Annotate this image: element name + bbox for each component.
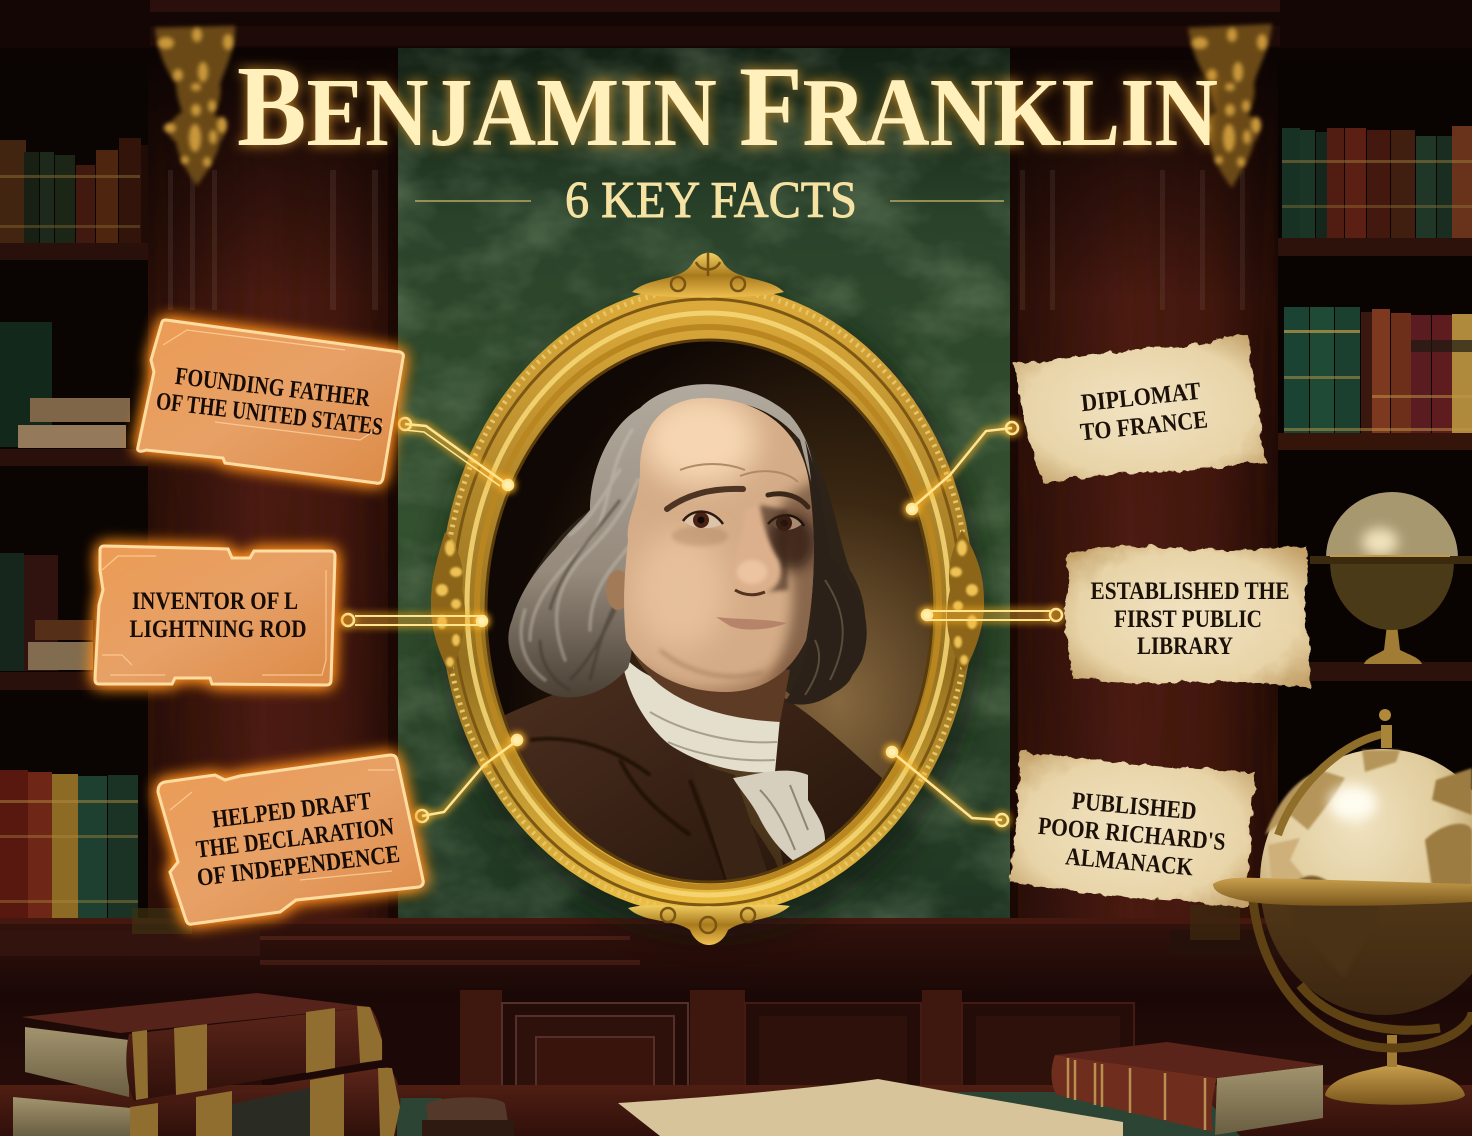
- frame right scroll: [947, 530, 984, 672]
- card: inventor: [95, 546, 335, 685]
- card: inventor: INVENTOR OF L: [132, 588, 298, 615]
- parchment: library: FIRST PUBLIC: [1114, 606, 1262, 633]
- cravat: [733, 771, 825, 866]
- frame ring: [440, 284, 974, 916]
- neck stock: [624, 662, 780, 772]
- card: declaration: THE DECLARATION: [195, 813, 395, 864]
- hair left: [508, 384, 816, 697]
- card: founding father: OF THE UNITED STATES: [155, 388, 384, 441]
- nose: [730, 505, 788, 595]
- card: inventor: LIGHTNING ROD: [130, 616, 306, 643]
- hair right: [785, 440, 867, 705]
- hair back: [508, 435, 865, 694]
- left bookshelf: [0, 60, 155, 944]
- card: declaration: HELPED DRAFT: [211, 788, 373, 834]
- parchment: almanack: ALMANACK: [1064, 843, 1195, 881]
- portrait painting: [480, 335, 940, 900]
- parchment: library: [1066, 546, 1310, 688]
- globe meridian arm: [1278, 733, 1390, 835]
- hair strands dark: [538, 498, 622, 689]
- parchment: diplomat: TO FRANCE: [1079, 406, 1209, 447]
- connector: founding father: [399, 418, 513, 490]
- desk surface: [0, 1085, 1472, 1136]
- subtitle: 6 KEY FACTS: [565, 172, 857, 229]
- card: declaration: [158, 755, 423, 924]
- mouth: [716, 617, 787, 630]
- face: [624, 398, 814, 692]
- parchment: library: ESTABLISHED THE: [1090, 578, 1290, 605]
- neck: [632, 650, 790, 722]
- connector: lightning rod: [342, 614, 487, 626]
- icon: inkwell: [422, 1097, 514, 1136]
- stock folds: [650, 712, 777, 760]
- hair strands light: [521, 430, 638, 680]
- icon: right gold corbel: [1188, 24, 1272, 188]
- right bookshelf: [1275, 60, 1472, 940]
- icon: large globe: [1213, 709, 1472, 1105]
- framed portrait: [431, 252, 987, 945]
- forehead lines: [680, 464, 798, 482]
- parchment: diplomat: DIPLOMAT: [1080, 378, 1202, 417]
- eyes: [683, 512, 804, 531]
- card: founding father: [138, 320, 403, 483]
- icon: stack of books: [13, 993, 400, 1136]
- globe ring: [1213, 878, 1472, 906]
- frame top crest: [632, 252, 784, 298]
- parchment: almanack: [1010, 752, 1255, 907]
- top cornice beam: [0, 0, 1472, 48]
- icon: paper on desk: [618, 1079, 1123, 1136]
- title: BENJAMIN FRANKLIN: [237, 43, 1218, 171]
- connector: library: [922, 609, 1062, 621]
- connector: almanack: [887, 747, 1008, 826]
- wood panel right: [1008, 60, 1278, 930]
- icon: left gold corbel: [155, 26, 235, 186]
- parchment: diplomat: [1014, 334, 1266, 482]
- icon: small globe: [1310, 492, 1472, 664]
- frame bottom crest: [628, 905, 790, 945]
- green wall panel: [398, 45, 1010, 920]
- ear: [606, 570, 625, 610]
- hair right strands: [805, 580, 843, 695]
- icon: closed book: [1051, 1042, 1323, 1135]
- coat: [504, 672, 882, 880]
- connector: diplomat: [907, 422, 1018, 514]
- card: declaration: OF INDEPENDENCE: [195, 841, 401, 892]
- wood panel left: [148, 60, 402, 930]
- brows: [667, 489, 743, 509]
- parchment: almanack: PUBLISHED: [1071, 788, 1198, 825]
- waistcoat: [708, 768, 767, 880]
- globe cradle: [1253, 900, 1472, 1048]
- wainscot base: [0, 905, 1472, 1093]
- coat folds: [530, 736, 726, 880]
- card: founding father: FOUNDING FATHER: [174, 363, 372, 412]
- parchment: almanack: POOR RICHARD'S: [1037, 813, 1227, 856]
- connector: declaration: [416, 735, 522, 822]
- parchment: library: LIBRARY: [1137, 633, 1233, 660]
- frame left scroll: [431, 532, 465, 675]
- cravat folds: [760, 785, 808, 850]
